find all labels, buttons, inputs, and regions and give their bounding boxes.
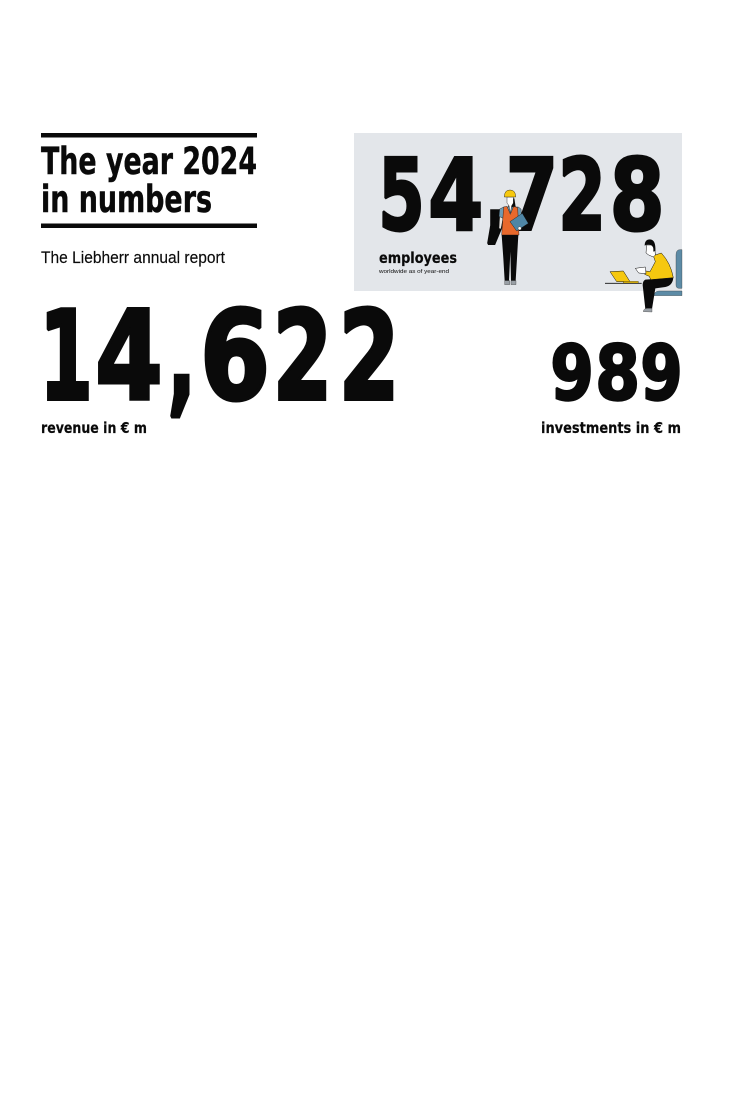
investments number: [550, 328, 683, 418]
investments number: 9: [640, 328, 683, 418]
revenue number: 1: [39, 285, 93, 429]
employees label: employees: [379, 249, 457, 267]
revenue label: revenue in € m: [41, 419, 147, 437]
revenue number: 6: [200, 285, 270, 429]
subtitle: The Liebherr annual report: [41, 248, 225, 267]
title block: [41, 133, 257, 228]
icon: worker with helmet and folder: [499, 190, 528, 285]
investments number: 9: [550, 328, 594, 418]
title block: The year 2024: [41, 140, 257, 183]
panel: employees: [354, 133, 682, 291]
employees number: 5: [378, 138, 425, 254]
employees number: 4: [428, 138, 483, 254]
employees number: [378, 138, 664, 254]
revenue number: 2: [273, 285, 332, 429]
employees number: 7: [506, 138, 558, 254]
investments number: 8: [595, 328, 640, 418]
title block: in numbers: [41, 178, 212, 221]
employees number: 2: [558, 138, 606, 254]
revenue number: 2: [339, 285, 400, 429]
revenue number: 4: [95, 285, 163, 429]
revenue number: ,: [167, 285, 196, 429]
employees sublabel: worldwide as of year-end: [378, 269, 449, 275]
employees number: 8: [610, 138, 664, 254]
icon: seated worker with laptop: [605, 239, 682, 312]
investments label: investments in € m: [541, 419, 681, 437]
revenue number: [39, 285, 399, 429]
employees number: ,: [485, 138, 508, 254]
